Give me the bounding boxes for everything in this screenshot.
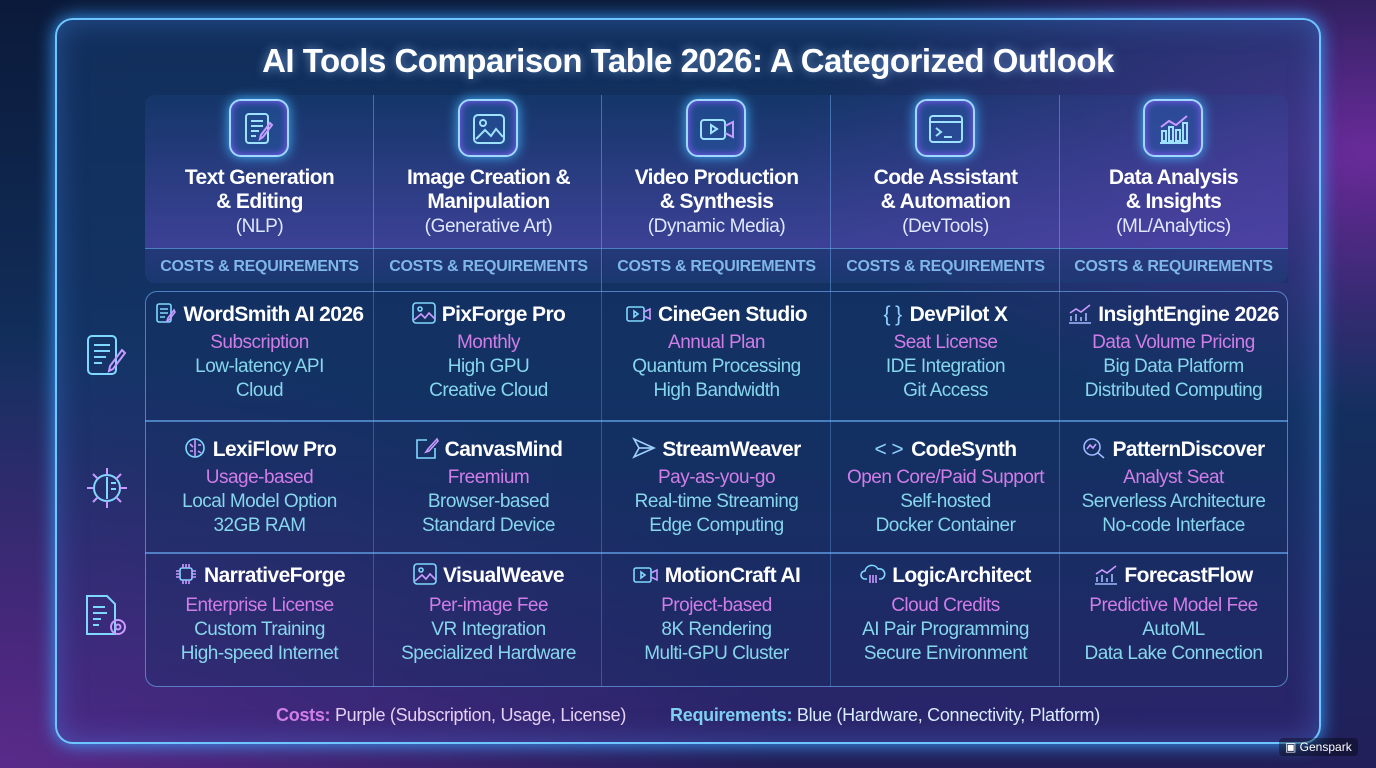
cell: PatternDiscover: No-code Interface xyxy=(1102,515,1245,536)
cell: CanvasMind: Standard Device xyxy=(422,515,555,536)
header column: video: Video Production xyxy=(635,166,798,189)
cell: InsightEngine 2026: Big Data Platform xyxy=(1103,356,1244,377)
cell: CodeSynth: Open Core/Paid Support xyxy=(847,467,1044,488)
icon: image xyxy=(458,99,518,157)
cell: MotionCraft AI xyxy=(633,564,800,664)
cell: StreamWeaver: Pay-as-you-go xyxy=(658,467,775,488)
cell: DevPilot X xyxy=(884,303,1008,401)
cell: CodeSynth: < > CodeSynth xyxy=(874,438,1016,461)
icon: chart xyxy=(1143,99,1203,157)
icon: video camera xyxy=(686,99,746,157)
header column: video: COSTS & REQUIREMENTS xyxy=(617,258,816,275)
cell: InsightEngine 2026 xyxy=(1069,303,1279,401)
header column: image: COSTS & REQUIREMENTS xyxy=(389,258,588,275)
cell: StreamWeaver: StreamWeaver xyxy=(662,438,801,461)
cell: PatternDiscover: Analyst Seat xyxy=(1123,467,1224,488)
header column: code xyxy=(831,90,1059,283)
cell: CineGen Studio xyxy=(626,303,807,401)
header column: image xyxy=(374,90,603,283)
header column: text: & Editing xyxy=(216,190,303,213)
cell: CanvasMind: Browser-based xyxy=(428,491,549,512)
header column: text: (NLP) xyxy=(236,216,283,237)
cell: WordSmith AI 2026 xyxy=(156,303,364,401)
icon: document pencil xyxy=(229,99,289,157)
legend: Costs: Purple (Subscription, Usage, License) Requirements: Blue (Hardware, Connectivity, Platform) xyxy=(276,705,1100,725)
header column: data: Data Analysis xyxy=(1109,166,1238,189)
header column: code: (DevTools) xyxy=(902,216,989,237)
cell: PixForge Pro: Creative Cloud xyxy=(429,380,548,401)
cell: LogicArchitect: Secure Environment xyxy=(864,643,1027,664)
header column: data: (ML/Analytics) xyxy=(1116,216,1231,237)
cell: LexiFlow Pro xyxy=(182,438,337,536)
cell: DevPilot X: IDE Integration xyxy=(886,356,1005,377)
cell: PatternDiscover xyxy=(1082,438,1266,536)
cell: LogicArchitect: Cloud Credits xyxy=(891,595,1000,616)
cell: ForecastFlow: Predictive Model Fee xyxy=(1089,595,1258,616)
header column: code: & Automation xyxy=(881,190,1010,213)
cell: NarrativeForge: High-speed Internet xyxy=(181,643,338,664)
cell: InsightEngine 2026: InsightEngine 2026 xyxy=(1098,303,1279,326)
cell: PatternDiscover: Serverless Architecture xyxy=(1082,491,1265,512)
header column: video: (Dynamic Media) xyxy=(648,216,785,237)
cell: NarrativeForge xyxy=(176,564,345,664)
cell: WordSmith AI 2026: Cloud xyxy=(236,380,283,401)
cell: ForecastFlow: AutoML xyxy=(1142,619,1205,640)
cell: StreamWeaver: Edge Computing xyxy=(649,515,784,536)
header column: image: Image Creation & xyxy=(407,166,570,189)
cell: WordSmith AI 2026: WordSmith AI 2026 xyxy=(183,303,364,326)
cell: PixForge Pro: High GPU xyxy=(448,356,529,377)
cell: CodeSynth: Docker Container xyxy=(876,515,1015,536)
cell: VisualWeave: Per-image Fee xyxy=(429,595,548,616)
cell: CineGen Studio: CineGen Studio xyxy=(658,303,807,326)
header column: text xyxy=(145,90,374,283)
cell: PatternDiscover: PatternDiscover xyxy=(1112,438,1265,461)
cell: DevPilot X: { } DevPilot X xyxy=(884,303,1007,326)
cell: LogicArchitect xyxy=(860,564,1032,664)
cell: VisualWeave: Specialized Hardware xyxy=(401,643,576,664)
header column: text: COSTS & REQUIREMENTS xyxy=(160,258,359,275)
cell: LexiFlow Pro: Local Model Option xyxy=(182,491,337,512)
header column: image: Manipulation xyxy=(427,190,550,213)
cell: PixForge Pro: Monthly xyxy=(457,332,520,353)
watermark: ▣ Genspark xyxy=(1285,740,1352,754)
cell: WordSmith AI 2026: Subscription xyxy=(210,332,309,353)
title: AI Tools Comparison Table 2026: A Categorized Outlook xyxy=(262,42,1114,79)
header column: code: Code Assistant xyxy=(874,166,1017,189)
cell: MotionCraft AI: Multi-GPU Cluster xyxy=(644,643,789,664)
header column: text: Text Generation xyxy=(185,166,334,189)
cell: CanvasMind: CanvasMind xyxy=(445,438,562,461)
cell: CodeSynth: Self-hosted xyxy=(900,491,991,512)
cell: InsightEngine 2026: Data Volume Pricing xyxy=(1092,332,1255,353)
side icon: document xyxy=(87,335,126,375)
cell: VisualWeave: VR Integration xyxy=(431,619,546,640)
cell: StreamWeaver: Real-time Streaming xyxy=(635,491,798,512)
cell: DevPilot X: Git Access xyxy=(903,380,988,401)
cell: StreamWeaver xyxy=(632,437,801,536)
cell: ForecastFlow: ForecastFlow xyxy=(1124,564,1253,587)
cell: ForecastFlow xyxy=(1084,564,1262,664)
cell: CanvasMind: Freemium xyxy=(448,467,529,488)
watermark xyxy=(1279,738,1358,756)
cell: MotionCraft AI: 8K Rendering xyxy=(661,619,772,640)
header column: data: & Insights xyxy=(1126,190,1221,213)
cell: PixForge Pro xyxy=(412,302,565,401)
cell: CineGen Studio: Quantum Processing xyxy=(632,356,801,377)
cell: CineGen Studio: High Bandwidth xyxy=(653,380,780,401)
side icon: gear xyxy=(87,468,127,508)
side icon: document gear xyxy=(86,595,126,635)
cell: PixForge Pro: PixForge Pro xyxy=(442,303,565,326)
cell: CodeSynth xyxy=(847,438,1044,536)
cell: MotionCraft AI: MotionCraft AI xyxy=(665,564,800,587)
header column: image: (Generative Art) xyxy=(425,216,552,237)
cell: LogicArchitect: AI Pair Programming xyxy=(862,619,1029,640)
table panel xyxy=(145,291,1288,687)
header column: video xyxy=(602,90,831,283)
cell: NarrativeForge: NarrativeForge xyxy=(204,564,345,587)
header column: data xyxy=(1060,90,1288,283)
cell: MotionCraft AI: Project-based xyxy=(661,595,772,616)
cell: DevPilot X: Seat License xyxy=(894,332,997,353)
header column: code: COSTS & REQUIREMENTS xyxy=(846,258,1045,275)
icon: terminal xyxy=(915,99,975,157)
cell: LexiFlow Pro: 32GB RAM xyxy=(213,515,306,536)
cell: WordSmith AI 2026: Low-latency API xyxy=(195,356,324,377)
cell: VisualWeave xyxy=(401,563,576,664)
cell: LexiFlow Pro: Usage-based xyxy=(206,467,313,488)
cell: NarrativeForge: Enterprise License xyxy=(185,595,334,616)
cell: NarrativeForge: Custom Training xyxy=(194,619,325,640)
header column: video: & Synthesis xyxy=(660,190,773,213)
cell: LogicArchitect: LogicArchitect xyxy=(892,564,1031,587)
cell: InsightEngine 2026: Distributed Computing xyxy=(1085,380,1262,401)
cell: ForecastFlow: Data Lake Connection xyxy=(1084,643,1262,664)
header band background xyxy=(145,95,1288,283)
cell: CineGen Studio: Annual Plan xyxy=(668,332,765,353)
cell: CanvasMind xyxy=(416,438,562,536)
header column: data: COSTS & REQUIREMENTS xyxy=(1074,258,1273,275)
cell: VisualWeave: VisualWeave xyxy=(443,564,564,587)
cell: LexiFlow Pro: LexiFlow Pro xyxy=(213,438,336,461)
